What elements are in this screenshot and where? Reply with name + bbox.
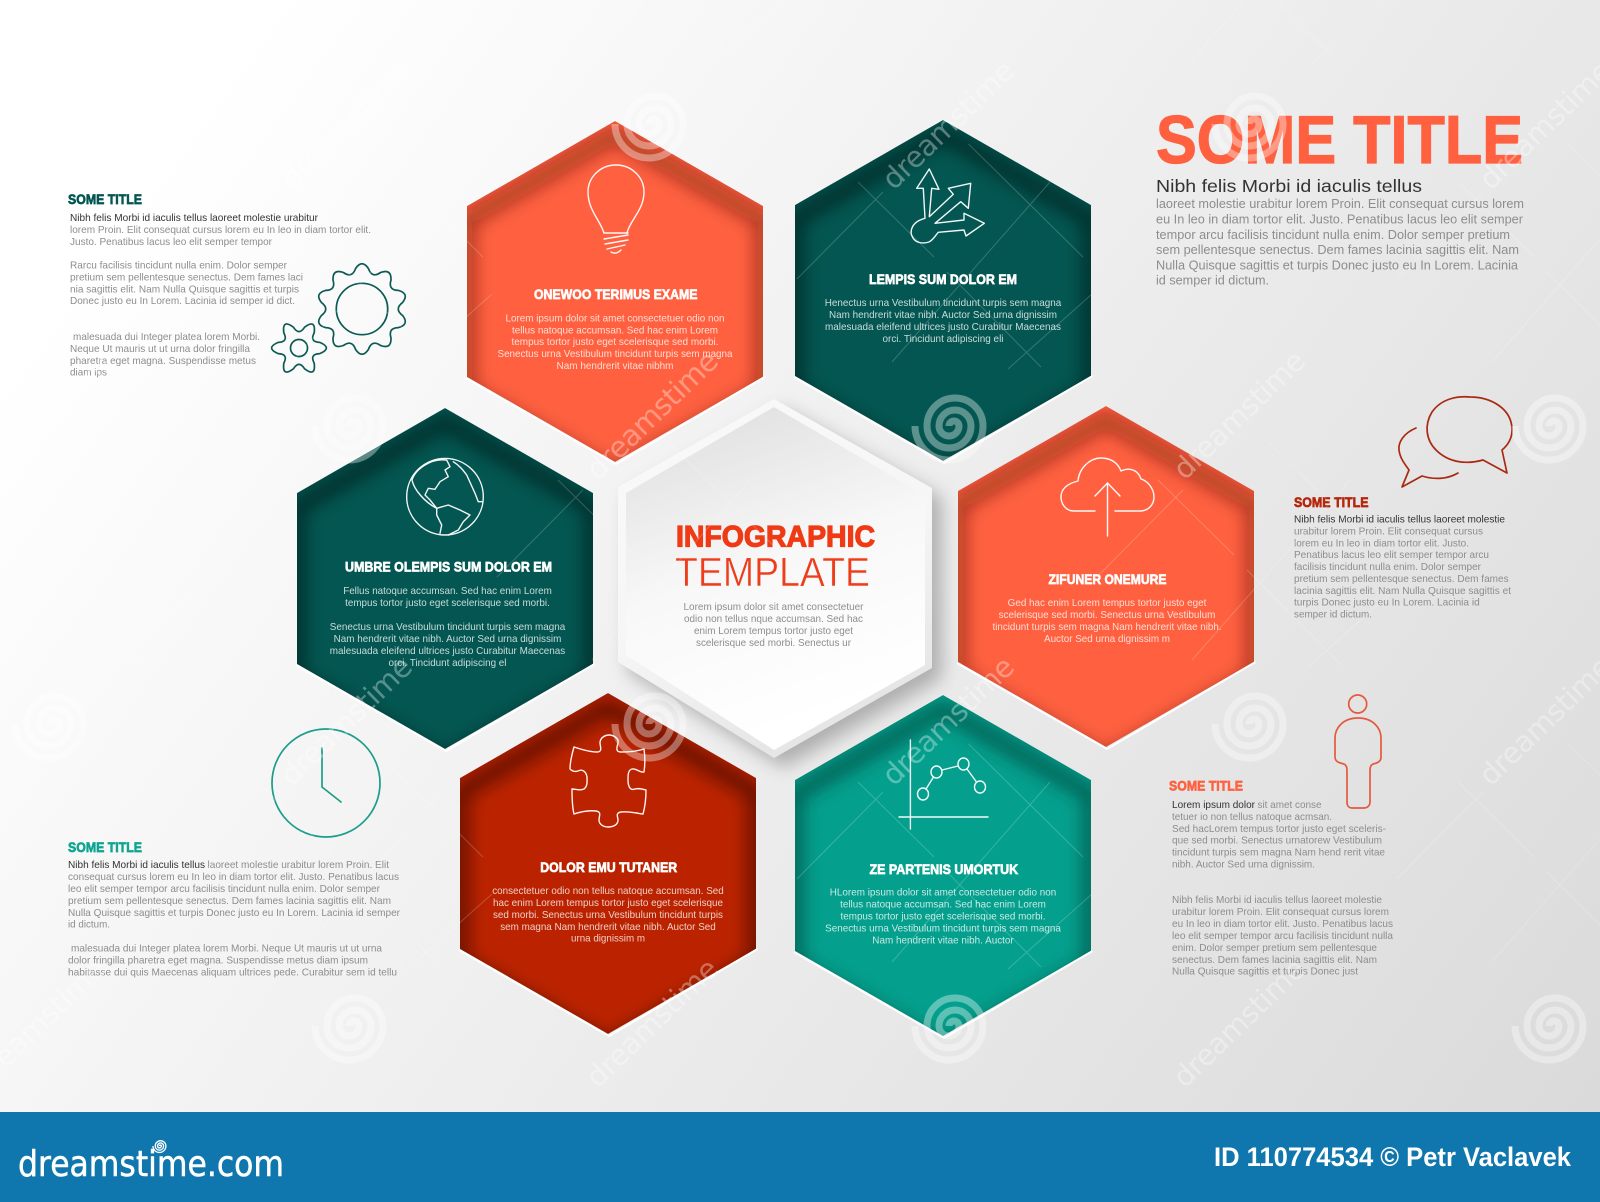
- text block: green description: Nam hendrerit vitae nibh. Auctor: [872, 936, 1014, 947]
- text block: bottom left paragraphs: Nulla Quisque sagittis et turpis Donec justo eu In Lorem. Lacinia id semper: [68, 908, 401, 919]
- text block: intro paragraph: tempor arcu facilisis tincidunt nulla enim. Dolor semper pretium: [1156, 227, 1510, 242]
- text block: right paragraph: urabitur lorem Proin. Elit consequat cursus: [1294, 527, 1483, 538]
- icon: puzzle piece: [570, 735, 646, 827]
- text: dreamstime: [875, 54, 1021, 196]
- heading: lempis sum dolor em: LEMPIS SUM DOLOR EM: [869, 272, 1017, 287]
- text block: intro paragraph: Nulla Quisque sagittis et turpis Donec justo eu In Lorem. Lacinia: [1156, 257, 1519, 272]
- text block: top left paragraphs: malesuada dui Integer platea lorem Morbi.: [73, 332, 260, 343]
- side block: right with speech bubbles: [1294, 397, 1512, 620]
- text block: center description: scelerisque sed morbi. Senectus ur: [696, 638, 852, 649]
- text: dreamstime: [273, 54, 419, 196]
- panel: center hexagon: [618, 399, 942, 768]
- text block: bottom right paragraphs: Nulla Quisque sagittis et turpis Donec just: [1172, 967, 1358, 978]
- text block: bottom left paragraphs: leo elit semper tempor arcu facilisis tincidunt nulla enim. Dolor semper: [68, 884, 381, 895]
- text block: top left paragraphs: diam ips: [70, 368, 107, 378]
- panel: red hexagon, bottom left: [459, 693, 758, 1048]
- panel: dark teal hexagon, middle left: [296, 408, 594, 763]
- text block: bottom right paragraphs: Sed hacLorem tempus tortor justo eget sceleris-: [1172, 824, 1386, 835]
- text block: bottom right paragraphs: urabitur lorem Proin. Elit consequat cursus lorem: [1172, 907, 1389, 918]
- text block: bottom right paragraphs: [1172, 800, 1393, 978]
- text block: bottom left paragraphs: malesuada dui Integer platea lorem Morbi. Neque Ut mauris ut ut urna: [71, 944, 382, 955]
- text block: orange description: [498, 314, 733, 372]
- text block: orange description: Senectus urna Vestibulum tincidunt turpis sem magna: [498, 349, 733, 360]
- text block: bottom right paragraphs: sit amet conse: [1258, 800, 1322, 811]
- text block: middle right description: Auctor Sed urna dignissim m: [1044, 634, 1170, 645]
- heading: SOME TITLE: [1294, 495, 1368, 510]
- heading: template: TEMPLATE: [675, 549, 870, 595]
- text block: dark teal description: malesuada eleifend ultrices justo Curabitur Maecenas: [825, 322, 1061, 333]
- text block: top left paragraphs: nia sagittis elit. Nam Nulla Quisque sagittis et turpis: [70, 284, 299, 295]
- text block: dark teal description: Nam hendrerit vitae nibh. Auctor Sed urna dignissim: [829, 310, 1057, 321]
- text block: middle right description: Ged hac enim Lorem tempus tortor justo eget: [1008, 598, 1206, 609]
- text block: middle left description: malesuada eleifend ultrices justo Curabitur Maecenas: [330, 646, 565, 657]
- text block: right paragraph: semper id dictum.: [1294, 610, 1372, 620]
- text block: dark teal description: orci. Tincidunt adipiscing eli: [882, 334, 1004, 345]
- text block: top left paragraphs: pharetra eget magna. Suspendisse metus: [70, 356, 256, 367]
- text block: top left paragraphs: pretium sem pellentesque senectus. Dem fames laci: [70, 272, 303, 284]
- text block: top left paragraphs: [70, 213, 371, 378]
- main title block, top right: [1156, 102, 1524, 287]
- text block: middle right description: [992, 598, 1222, 645]
- heading: SOME TITLE: [1169, 779, 1243, 794]
- text block: center description: odio non tellus nque accumsan. Sed hac: [684, 614, 863, 625]
- heading: umbre olempis sum dolor em: UMBRE OLEMPIS SUM DOLOR EM: [345, 560, 552, 575]
- text block: bottom left paragraphs: pretium sem pellentesque senectus. Dem fames lacinia sagittis elit. Nam: [68, 896, 391, 907]
- text: dreamstime: [1166, 952, 1312, 1094]
- side block: bottom right with person: [1169, 695, 1393, 978]
- text block: bottom right paragraphs: Nibh felis Morbi id iaculis tellus laoreet molestie: [1172, 895, 1382, 906]
- text block: right paragraph: turpis Donec justo eu In Lorem. Lacinia id: [1294, 598, 1480, 609]
- footer bar: [0, 1112, 1600, 1202]
- side block: bottom left with clock: [68, 729, 401, 978]
- text block: right paragraph: [1294, 515, 1511, 620]
- text block: middle left description: tempus tortor justo eget scelerisque sed morbi.: [345, 598, 550, 609]
- text block: right paragraph: facilisis tincidunt nulla enim. Dolor semper: [1294, 562, 1482, 573]
- footer credit: ID 110774534 © Petr Vaclavek: [1214, 1142, 1572, 1172]
- text block: green description: Senectus urna Vestibulum tincidunt turpis sem magna: [825, 924, 1061, 935]
- heading: SOME TITLE: [68, 192, 142, 207]
- footer logo: dreamstime.com: [18, 1144, 284, 1185]
- text block: bottom left paragraphs: consequat cursus lorem eu In leo in diam tortor elit. Justo. Penatibus lacus: [68, 872, 399, 883]
- text block: orange description: tempus tortor justo eget scelerisque sed morbi.: [512, 337, 718, 348]
- subtitle: Nibh felis Morbi id iaculis tellus: [1156, 176, 1422, 196]
- text: dreamstime: [1166, 344, 1312, 486]
- text block: right paragraph: lorem eu In leo in diam tortor elit. Justo.: [1294, 538, 1469, 550]
- text block: bottom left paragraphs: laoreet molestie urabitur lorem Proin. Elit: [208, 860, 389, 871]
- text block: middle left description: orci. Tincidunt adipiscing el: [388, 658, 506, 669]
- icon: clock: [272, 729, 380, 837]
- text block: bottom left paragraphs: id dictum.: [68, 920, 110, 931]
- text: dreamstime: [579, 952, 725, 1094]
- text block: middle right description: tincidunt turpis sem magna Nam hendrerit vitae nibh.: [992, 622, 1222, 633]
- text block: red description: [492, 886, 724, 945]
- text block: bottom right paragraphs: tincidunt turpis sem magna Nam hend rerit vitae: [1172, 848, 1385, 859]
- text block: bottom right paragraphs: nibh. Auctor Sed urna dignissim.: [1172, 859, 1315, 870]
- text block: bottom left paragraphs: habitasse dui quis Maecenas aliquam ultrices pede. Curabitur sem id tellu: [68, 967, 397, 978]
- text block: middle left description: [330, 586, 566, 669]
- text block: middle left description: Nam hendrerit vitae nibh. Auctor Sed urna dignissim: [334, 634, 561, 645]
- text block: intro paragraph: sem pellentesque senectus. Dem fames lacinia sagittis elit. Nam: [1156, 242, 1519, 257]
- text block: top left paragraphs: lorem Proin. Elit consequat cursus lorem eu In leo in diam tortor elit.: [70, 225, 371, 236]
- text block: green description: HLorem ipsum dolor sit amet consectetuer odio non: [830, 888, 1056, 899]
- text block: right paragraph: pretium sem pellentesque senectus. Dem fames: [1294, 574, 1509, 585]
- panel: dark teal hexagon, top right: [794, 120, 1092, 475]
- heading: ze partenis umortuk: ZE PARTENIS UMORTUK: [870, 862, 1018, 877]
- text block: center description: [684, 602, 864, 649]
- icon: gears: [272, 264, 405, 372]
- icon: person: [1335, 695, 1381, 808]
- text block: green description: tellus natoque accumsan. Sed hac enim Lorem: [840, 900, 1046, 911]
- text block: middle left description: Fellus natoque accumsan. Sed hac enim Lorem: [343, 586, 552, 597]
- text block: red description: sed morbi. Senectus urna Vestibulum tincidunt turpis: [493, 910, 723, 921]
- text block: center description: Lorem ipsum dolor sit amet consectetuer: [684, 602, 864, 613]
- text block: middle right description: scelerisque sed morbi. Senectus urna Vestibulum: [999, 610, 1215, 621]
- text block: intro paragraph: id semper id dictum.: [1156, 272, 1269, 287]
- icon: line chart: [899, 740, 988, 829]
- text block: dark teal description: [825, 298, 1061, 345]
- text block: red description: urna dignissim m: [571, 934, 645, 945]
- text block: right paragraph: Nibh felis Morbi id iaculis tellus laoreet molestie: [1294, 515, 1505, 526]
- text block: intro paragraph: [1156, 196, 1524, 287]
- text block: top left paragraphs: Rarcu facilisis tincidunt nulla enim. Dolor semper: [70, 261, 288, 272]
- heading: onewoo terimus exame: ONEWOO TERIMUS EXAME: [534, 287, 697, 302]
- text block: bottom right paragraphs: eu In leo in diam tortor elit. Justo. Penatibus lacus: [1172, 919, 1393, 930]
- text block: middle left description: Senectus urna Vestibulum tincidunt turpis sem magna: [330, 622, 566, 633]
- icon: speech bubbles: [1399, 397, 1512, 487]
- side block: top left with gears: [68, 192, 405, 378]
- title: SOME TITLE: [1156, 102, 1523, 178]
- text block: bottom right paragraphs: leo elit semper tempor arcu facilisis tincidunt nulla: [1172, 931, 1393, 942]
- icon: branching arrows: [911, 169, 984, 243]
- text block: red description: hac enim Lorem tempus tortor justo eget scelerisque: [493, 898, 723, 909]
- text block: green description: tempus tortor justo eget scelerisque sed morbi.: [840, 912, 1046, 923]
- text block: bottom left paragraphs: [68, 860, 401, 978]
- text block: bottom left paragraphs: dolor fringilla pharetra eget magna. Suspendisse metus diam ipsum: [68, 956, 368, 967]
- text block: dark teal description: Henectus urna Vestibulum tincidunt turpis sem magna: [825, 298, 1061, 309]
- text block: bottom left paragraphs: Nibh felis Morbi id iaculis tellus: [68, 860, 205, 871]
- panel: orange hexagon, top left: [466, 121, 764, 476]
- panel: orange hexagon, middle right: [957, 406, 1256, 761]
- heading: infographic: INFOGRAPHIC: [676, 520, 875, 554]
- text block: bottom right paragraphs: que sed morbi. Senectus urnatorew Vestibulum: [1172, 836, 1382, 847]
- heading: dolor emu tutaner: DOLOR EMU TUTANER: [540, 860, 677, 875]
- text block: top left paragraphs: Neque Ut mauris ut ut urna dolor fringilla: [70, 344, 250, 355]
- text block: intro paragraph: eu In leo in diam tortor elit. Justo. Penatibus lacus leo elit semper: [1156, 212, 1524, 226]
- text block: green description: [825, 888, 1061, 947]
- text block: top left paragraphs: Justo. Penatibus lacus leo elit semper tempor: [70, 237, 273, 248]
- text block: bottom right paragraphs: Lorem ipsum dolor: [1172, 800, 1256, 811]
- text block: bottom right paragraphs: senectus. Dem fames lacinia sagittis elit. Nam: [1172, 955, 1377, 966]
- text block: red description: sem magna Nam hendrerit vitae nibh. Auctor Sed: [500, 922, 716, 933]
- text: dreamstime: [579, 344, 725, 486]
- text: dreamstime: [273, 650, 419, 792]
- text block: center description: enim Lorem tempus tortor justo eget: [694, 626, 853, 637]
- text: dreamstime: [875, 650, 1021, 792]
- heading: zifuner onemure: ZIFUNER ONEMURE: [1048, 572, 1166, 587]
- text block: intro paragraph: laoreet molestie urabitur lorem Proin. Elit consequat cursus lorem: [1156, 196, 1524, 211]
- heading: SOME TITLE: [68, 840, 142, 855]
- text block: top left paragraphs: Nibh felis Morbi id iaculis tellus laoreet molestie urabitur: [70, 213, 319, 224]
- text block: red description: consectetuer odio non tellus natoque accumsan. Sed: [492, 886, 724, 897]
- text block: bottom right paragraphs: enim. Dolor semper pretium sem pellentesque: [1172, 943, 1377, 954]
- icon: cloud upload: [1061, 458, 1154, 536]
- text block: orange description: tellus natoque accumsan. Sed hac enim Lorem: [512, 326, 718, 336]
- icon: globe: [407, 458, 483, 535]
- text block: orange description: Lorem ipsum dolor sit amet consectetuer odio non: [506, 314, 725, 325]
- text block: right paragraph: Penatibus lacus leo elit semper tempor arcu: [1294, 550, 1489, 561]
- panel: green hexagon, bottom right: [794, 695, 1092, 1050]
- text block: right paragraph: lacinia sagittis elit. Nam Nulla Quisque sagittis et: [1294, 586, 1511, 597]
- text block: orange description: Nam hendrerit vitae nibhm: [556, 361, 674, 372]
- icon: light bulb: [588, 165, 644, 253]
- text block: bottom right paragraphs: tetuer io non tellus natoque acmsan.: [1172, 812, 1332, 823]
- text block: top left paragraphs: Donec justo eu In Lorem. Lacinia id semper id dict.: [70, 296, 295, 307]
